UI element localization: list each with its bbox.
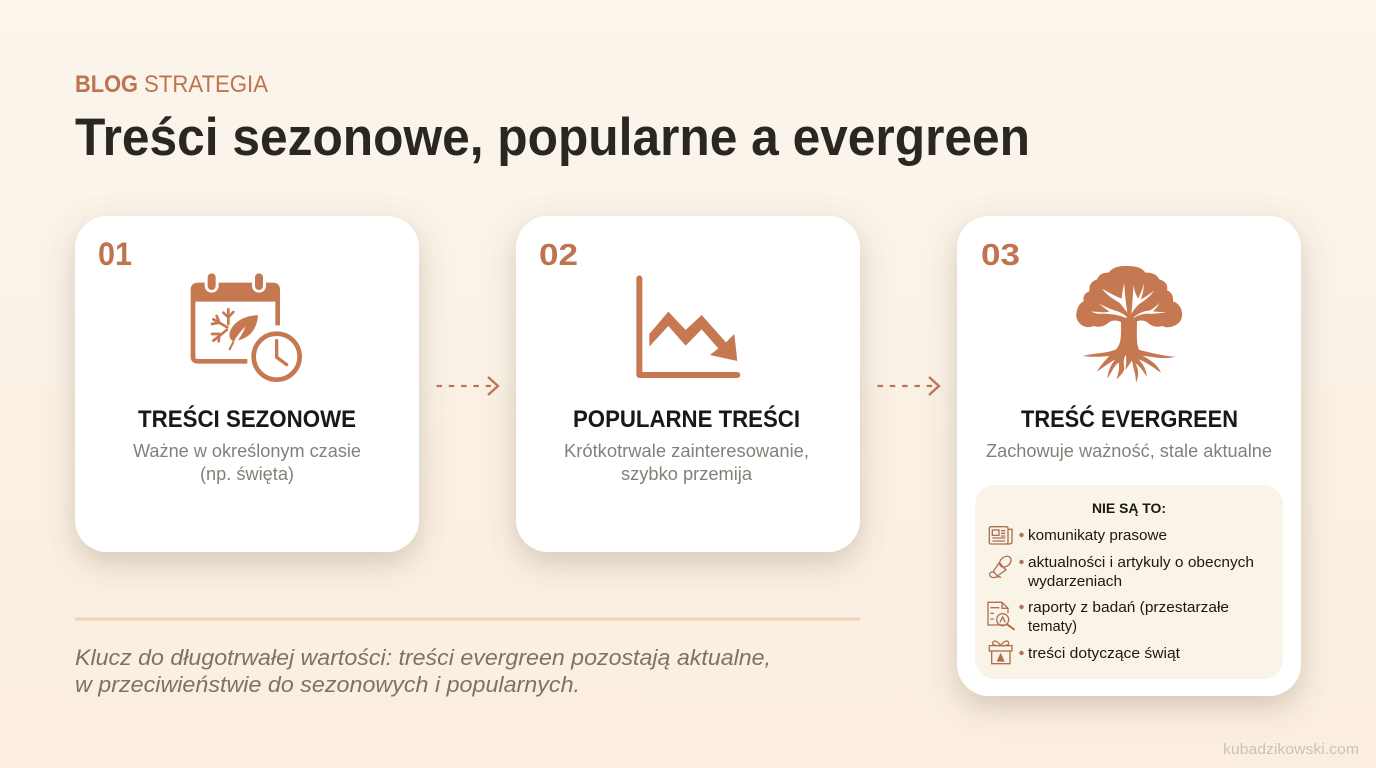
description: Zachowuje ważność, stale aktualne bbox=[986, 441, 1272, 461]
list item 3: raporty z badań (przestarzałe bbox=[1028, 599, 1229, 616]
key takeaway: Klucz do długotrwałej wartości: treści evergreen pozostają aktualne, bbox=[75, 645, 771, 670]
footer credit: kubadzikowski.com bbox=[1223, 742, 1359, 758]
number 02: 02 bbox=[539, 237, 578, 272]
description: Krótkotrwale zainteresowanie, bbox=[564, 441, 809, 461]
list item 2 bbox=[1019, 554, 1254, 590]
list item 2: wydarzeniach bbox=[1027, 573, 1122, 590]
arrow 1 bbox=[436, 377, 498, 395]
icon: tree with roots bbox=[1076, 266, 1182, 383]
number 01: 01 bbox=[98, 236, 132, 272]
key takeaway: w przeciwieństwie do sezonowych i popularnych. bbox=[75, 672, 580, 697]
list heading: NIE SĄ TO: bbox=[1092, 500, 1166, 516]
icon: falling line chart bbox=[639, 278, 737, 375]
description: Ważne w określonym czasie bbox=[133, 441, 361, 461]
eyebrow: blog strategia bbox=[75, 71, 268, 98]
heading: POPULARNE TREŚCI bbox=[573, 405, 800, 433]
list item 4: treści dotyczące świąt bbox=[1028, 645, 1181, 662]
description bbox=[133, 441, 361, 484]
eyebrow: blog strategia: STRATEGIA bbox=[144, 71, 268, 98]
arrow 2 bbox=[878, 377, 939, 395]
eyebrow: blog strategia: BLOG bbox=[75, 71, 138, 98]
list item 3 bbox=[1019, 599, 1229, 635]
description: szybko przemija bbox=[621, 464, 753, 484]
icon: gift bbox=[989, 641, 1012, 664]
icon: calendar with leaf and clock bbox=[191, 271, 300, 380]
list item 2: aktualności i artykuly o obecnych bbox=[1028, 554, 1254, 571]
heading: TREŚĆ EVERGREEN bbox=[1021, 405, 1238, 433]
list item 1: komunikaty prasowe bbox=[1028, 527, 1167, 544]
icon: newspaper bbox=[989, 527, 1012, 544]
number 03: 03 bbox=[981, 237, 1020, 272]
list item 3: tematy) bbox=[1028, 618, 1077, 635]
heading: TREŚCI SEZONOWE bbox=[138, 405, 356, 433]
description: (np. święta) bbox=[200, 464, 294, 484]
title: Treści sezonowe, popularne a evergreen bbox=[75, 108, 1030, 167]
panel: card 03 evergreen bbox=[957, 216, 1301, 696]
icon: microphone bbox=[990, 554, 1013, 578]
panel: card 02 popular bbox=[516, 216, 860, 552]
description bbox=[564, 441, 809, 484]
panel: card 01 seasonal bbox=[75, 216, 419, 552]
panel: not evergreen list bbox=[975, 485, 1283, 679]
icon: report with magnifier bbox=[988, 602, 1014, 629]
key takeaway bbox=[75, 645, 771, 697]
